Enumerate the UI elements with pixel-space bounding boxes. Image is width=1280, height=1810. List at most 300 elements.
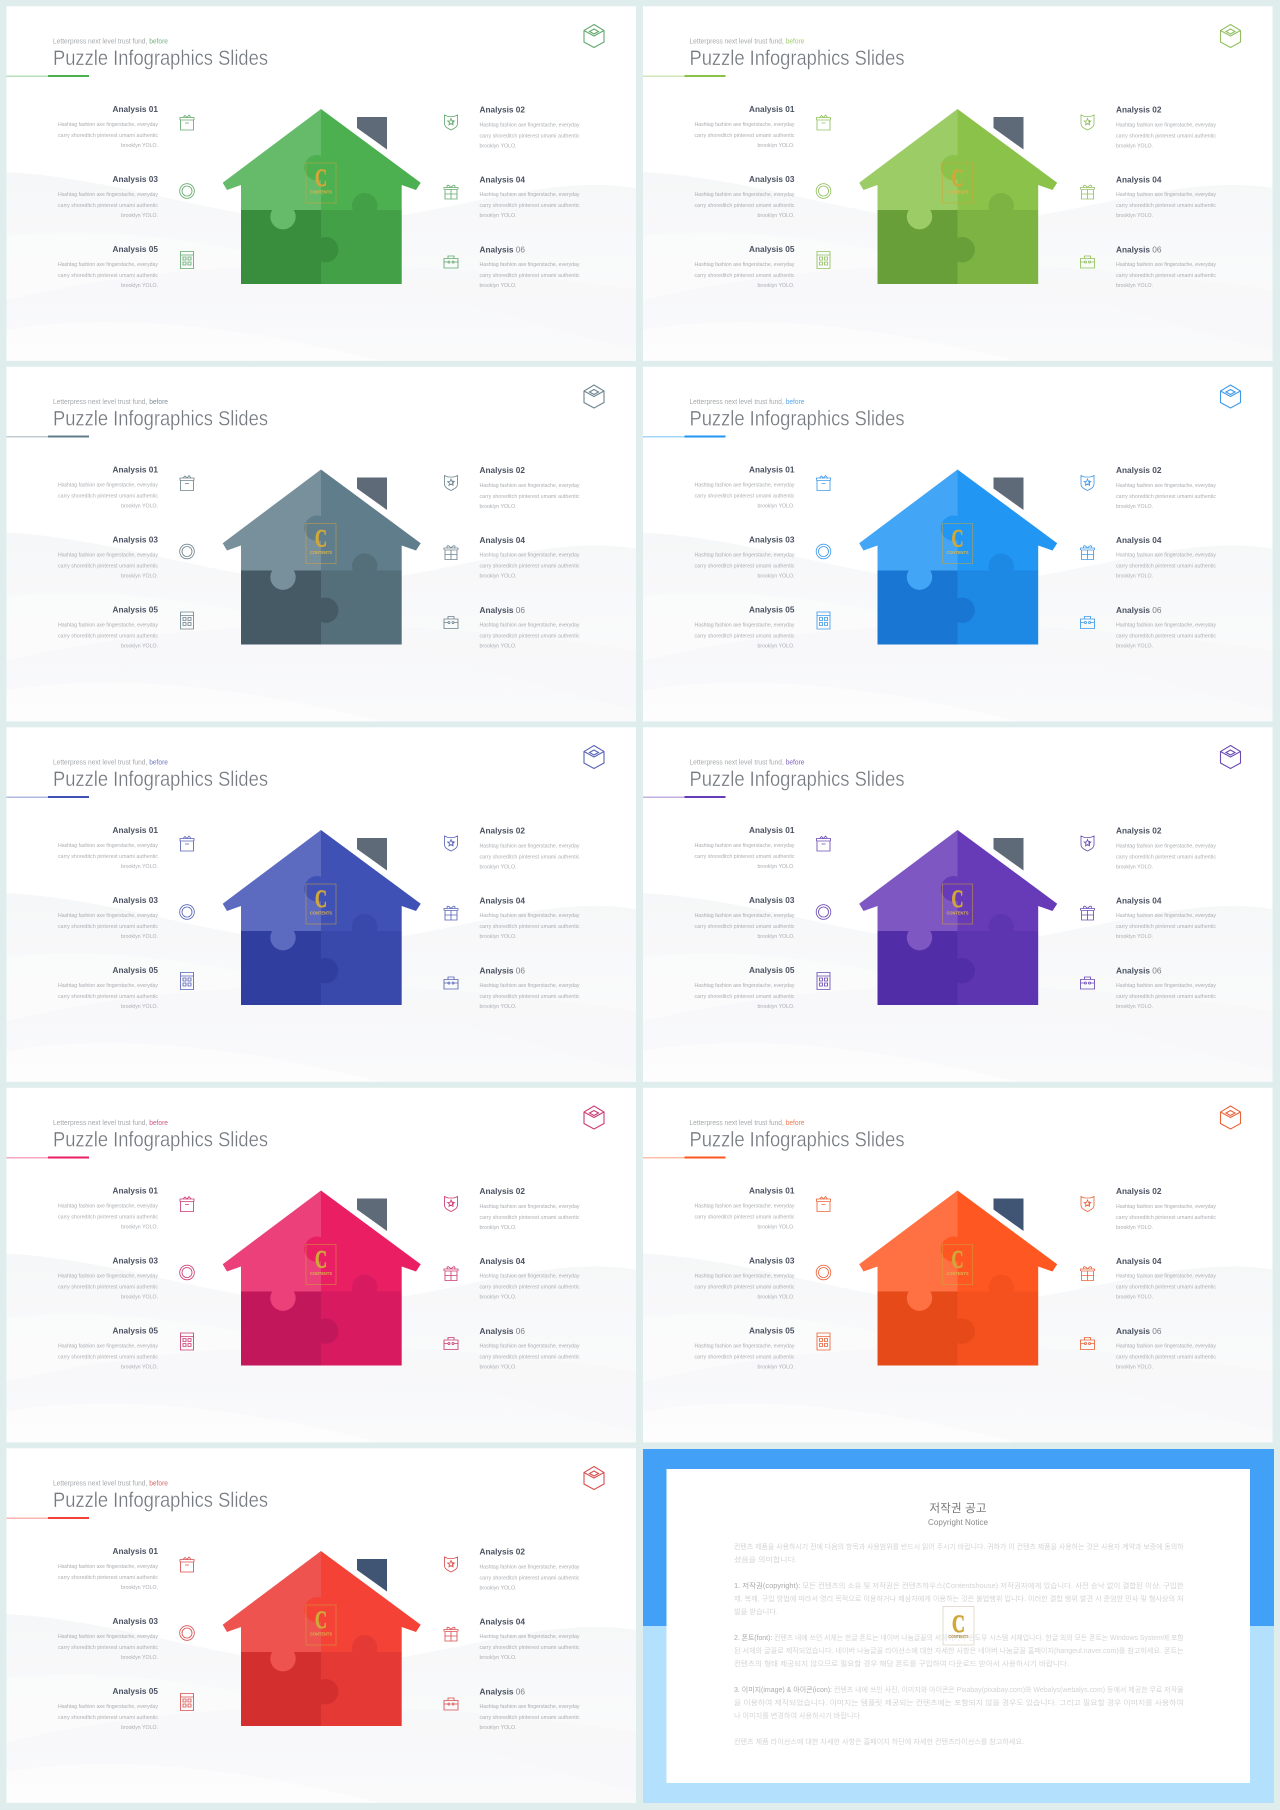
icon: calendar — [180, 1333, 194, 1350]
text: Analysis 05: Hashtag fashion axe fingerstache, everyday — [694, 262, 795, 268]
panel: copyright notice — [643, 1449, 1274, 1803]
watermark: CONTENTS — [946, 910, 968, 916]
text: Analysis 04: brooklyn YOLO. — [1116, 934, 1153, 940]
icon: calendar — [180, 972, 194, 990]
icon: briefcase — [1080, 1338, 1094, 1350]
icon: cube logo — [1220, 24, 1240, 48]
text: Analysis 05: Analysis 05 — [112, 244, 158, 254]
text: Analysis 05: Analysis 05 — [112, 1686, 158, 1696]
watermark: CONTENTS — [310, 910, 332, 916]
notice intro — [734, 1542, 1184, 1564]
text: Analysis 06: carry shoreditch pinterest umami authentic — [1116, 634, 1216, 640]
text: Analysis 01: brooklyn YOLO. — [121, 864, 158, 870]
watermark — [306, 524, 336, 564]
heading underline — [643, 436, 726, 438]
text: Analysis 04: carry shoreditch pinterest umami authentic — [480, 203, 580, 209]
text: Analysis 06: Analysis 06 — [480, 1686, 525, 1696]
text: Analysis 01 — [694, 104, 795, 149]
text: Analysis 06: brooklyn YOLO. — [480, 1004, 516, 1010]
watermark — [943, 1606, 974, 1645]
icon: box — [816, 476, 830, 490]
text: Analysis 01: brooklyn YOLO. — [758, 864, 794, 870]
watermark: CONTENTS — [946, 1271, 968, 1276]
text: Analysis 06: brooklyn YOLO. — [1116, 644, 1153, 650]
text: Analysis 06: Analysis 06 — [1116, 244, 1162, 254]
text: Analysis 04: brooklyn YOLO. — [480, 934, 516, 940]
icon: shield — [444, 1196, 458, 1212]
icon: box — [180, 476, 194, 490]
watermark: C — [952, 1611, 965, 1638]
watermark: CONTENTS — [946, 190, 968, 194]
text: Analysis 04: Analysis 04 — [1116, 535, 1162, 545]
house puzzle — [223, 1190, 421, 1366]
icon: shield — [1081, 1196, 1094, 1212]
text: Analysis 03: Hashtag fashion axe fingerstache, everyday — [58, 192, 158, 198]
text: Analysis 06: carry shoreditch pinterest umami authentic — [480, 994, 580, 1000]
notice font: 된 서체와 글꼴로 제작되었습니다. 네이버 나눔글꼴 라이선스에 대한 자세한 사항은 네이버 나눔글꼴 홈페이지(hangeul.naver.com)를 참고하세요. 폰트는 — [734, 1646, 1184, 1655]
text: Analysis 03: brooklyn YOLO. — [121, 1655, 158, 1661]
text: Analysis 04: Analysis 04 — [480, 1616, 525, 1626]
text: Analysis 04: brooklyn YOLO. — [1116, 1294, 1153, 1300]
text: Analysis 01: brooklyn YOLO. — [758, 1224, 794, 1230]
text: Analysis 05: Hashtag fashion axe fingerstache, everyday — [58, 1344, 158, 1350]
text: Analysis 03: Analysis 03 — [112, 534, 158, 544]
icon: briefcase — [1080, 256, 1094, 268]
text: Analysis 04: Hashtag fashion axe fingerstache, everyday — [1116, 552, 1216, 558]
house puzzle — [859, 470, 1057, 644]
text: Analysis 04: carry shoreditch pinterest umami authentic — [1116, 203, 1216, 209]
text: Analysis 01 — [58, 464, 158, 510]
text: Analysis 04 — [480, 535, 580, 580]
text: Analysis 05: carry shoreditch pinterest umami authentic — [58, 1715, 158, 1721]
text: Analysis 05 — [694, 965, 795, 1010]
icon: ring — [180, 1626, 194, 1640]
text: Analysis 03 — [58, 1616, 158, 1661]
text: Analysis 01: Hashtag fashion axe fingerstache, everyday — [58, 122, 158, 128]
text: Analysis 01 — [694, 464, 795, 510]
icon: calendar — [817, 612, 830, 629]
watermark: CONTENTS — [946, 550, 968, 555]
text: Analysis 02: Analysis 02 — [480, 104, 525, 114]
notice copyright: 제, 복제, 구입 방법에 따라서 영리 목적으로 이용하거나 제삼자에게 이용하는 것은 불법행위 입니다. 이러한 결합 행위 발견 시 준엄한 민사 및 형사상의 처 — [734, 1594, 1184, 1603]
text: Analysis 03: brooklyn YOLO. — [758, 934, 794, 940]
text: Analysis 05: carry shoreditch pinterest umami authentic — [58, 273, 158, 279]
icon: ring — [816, 1265, 831, 1280]
panel: light green slide — [643, 6, 1272, 361]
text: Analysis 04: carry shoreditch pinterest umami authentic — [1116, 924, 1216, 930]
text: Analysis 04 — [480, 896, 580, 940]
text: Analysis 02: Analysis 02 — [480, 1546, 525, 1556]
icon: box — [180, 836, 194, 851]
text: Analysis 06: carry shoreditch pinterest umami authentic — [1116, 273, 1216, 279]
text: Analysis 05: brooklyn YOLO. — [758, 1004, 794, 1010]
icon: shield — [444, 476, 458, 490]
text: Analysis 04: Analysis 04 — [480, 535, 525, 545]
text: Analysis 06: brooklyn YOLO. — [480, 283, 516, 289]
house puzzle — [223, 1551, 421, 1726]
text: Analysis 05: carry shoreditch pinterest umami authentic — [694, 1354, 795, 1360]
text: Analysis 02 — [480, 465, 580, 510]
text: Analysis 05: Hashtag fashion axe fingerstache, everyday — [58, 983, 158, 989]
text: Analysis 04: carry shoreditch pinterest umami authentic — [1116, 564, 1216, 570]
notice copyright: 벌을 받습니다. — [734, 1607, 778, 1616]
heading underline — [6, 796, 89, 798]
text: Analysis 01 — [694, 825, 795, 870]
text: Analysis 02: brooklyn YOLO. — [480, 144, 516, 150]
text: Analysis 03: carry shoreditch pinterest umami authentic — [694, 924, 795, 930]
watermark: C — [315, 1246, 327, 1274]
text: Analysis 01: Hashtag fashion axe fingerstache, everyday — [694, 482, 795, 488]
text: Analysis 02: carry shoreditch pinterest umami authentic — [480, 854, 580, 860]
text: Analysis 05: carry shoreditch pinterest umami authentic — [694, 273, 795, 279]
heading underline — [643, 796, 726, 798]
icon: box — [180, 1196, 194, 1212]
text: Analysis 02: Analysis 02 — [480, 826, 525, 836]
text: Analysis 06: Analysis 06 — [1116, 605, 1162, 615]
notice image and icon: 을 이용하여 제작되었습니다. 이미지는 템플릿 제공되는 컨텐츠에는 포함되지 않을 경우도 있습니다. 그리고 필요할 경우 이미지를 사용하여 — [734, 1698, 1184, 1707]
icon: gift — [444, 1267, 458, 1280]
text: Analysis 06: Analysis 06 — [1116, 1326, 1162, 1336]
text: Analysis 04 — [480, 1256, 580, 1300]
text: Analysis 06: brooklyn YOLO. — [1116, 1004, 1153, 1010]
text: Analysis 01: Hashtag fashion axe fingerstache, everyday — [694, 122, 795, 128]
text: Analysis 02: Analysis 02 — [480, 465, 525, 475]
text: Analysis 02: Analysis 02 — [1116, 1186, 1162, 1196]
icon: ring — [180, 905, 194, 919]
watermark: C — [952, 165, 964, 192]
text: Analysis 01: Hashtag fashion axe fingerstache, everyday — [58, 1564, 158, 1570]
text: Analysis 06: Analysis 06 — [480, 605, 525, 615]
panel: green slide — [6, 6, 636, 361]
text: Analysis 03: Hashtag fashion axe fingerstache, everyday — [694, 913, 795, 919]
notice copyright — [734, 1581, 1184, 1616]
text: Analysis 06 — [1116, 1326, 1216, 1370]
panel: purple slide — [643, 727, 1272, 1082]
notice copyright: 1. 저작권(copyright): 모든 컨텐츠의 소유 및 저작권은 컨텐츠하우스(Contentshouse) 저작권자에게 있습니다. 사전 승낙 없이 결합된 이상, 구입한 — [734, 1581, 1184, 1590]
text: Analysis 01: carry shoreditch pinterest umami authentic — [58, 133, 158, 139]
text: Analysis 05: Analysis 05 — [749, 965, 795, 975]
kicker: Letterpress next level trust fund, before — [53, 1478, 168, 1488]
text: Analysis 02: carry shoreditch pinterest umami authentic — [1116, 854, 1216, 860]
text: Analysis 03 — [58, 1256, 158, 1300]
text: Analysis 04: Hashtag fashion axe fingerstache, everyday — [480, 192, 580, 198]
text: Analysis 02: Hashtag fashion axe fingerstache, everyday — [1116, 483, 1216, 489]
icon: briefcase — [444, 256, 458, 268]
house puzzle — [223, 830, 421, 1005]
text: Analysis 02: carry shoreditch pinterest umami authentic — [480, 1215, 580, 1221]
text: Analysis 05: brooklyn YOLO. — [121, 283, 158, 289]
text: Analysis 05: Hashtag fashion axe fingerstache, everyday — [694, 983, 795, 989]
heading underline — [643, 1156, 726, 1158]
text: Analysis 06: carry shoreditch pinterest umami authentic — [1116, 1354, 1216, 1360]
text: Analysis 06 — [1116, 244, 1216, 289]
icon: calendar — [180, 252, 194, 268]
watermark: C — [315, 165, 327, 192]
heading: Puzzle Infographics Slides — [690, 408, 904, 430]
panel: blue-grey slide — [6, 367, 636, 721]
house puzzle — [859, 830, 1057, 1005]
text: Analysis 05 — [58, 604, 158, 650]
watermark: C — [952, 1246, 964, 1274]
text: Analysis 06: Analysis 06 — [480, 966, 525, 976]
text: Analysis 03: Hashtag fashion axe fingerstache, everyday — [694, 1274, 795, 1280]
text: Analysis 02 — [480, 104, 580, 150]
watermark — [306, 163, 336, 203]
heading underline — [6, 1517, 89, 1519]
icon: briefcase — [444, 616, 458, 628]
text: Analysis 03: carry shoreditch pinterest umami authentic — [694, 1284, 795, 1290]
watermark: C — [952, 886, 964, 913]
text: Analysis 05 — [58, 1686, 158, 1731]
icon: box — [816, 836, 830, 851]
icon: gift — [1080, 1267, 1094, 1280]
panel: indigo slide — [6, 727, 636, 1082]
icon: ring — [816, 544, 831, 559]
watermark: CONTENTS — [310, 1632, 332, 1636]
text: Analysis 06: carry shoreditch pinterest umami authentic — [480, 1715, 580, 1721]
text: Analysis 02: Hashtag fashion axe fingerstache, everyday — [480, 1564, 580, 1570]
text: Analysis 03: carry shoreditch pinterest umami authentic — [58, 924, 158, 930]
kicker: Letterpress next level trust fund, before — [53, 758, 168, 766]
text: Analysis 05: brooklyn YOLO. — [121, 1364, 158, 1370]
kicker: Letterpress next level trust fund, before — [690, 36, 804, 46]
text: Analysis 04: Analysis 04 — [480, 896, 525, 906]
text: Analysis 03: carry shoreditch pinterest umami authentic — [58, 564, 158, 570]
text: Analysis 04: Analysis 04 — [1116, 174, 1162, 184]
icon: ring — [180, 544, 194, 559]
text: Analysis 04: Hashtag fashion axe fingerstache, everyday — [1116, 192, 1216, 198]
text: Analysis 04: carry shoreditch pinterest umami authentic — [480, 564, 580, 570]
text: Analysis 03: brooklyn YOLO. — [758, 1294, 794, 1300]
text: Analysis 04: Hashtag fashion axe fingerstache, everyday — [1116, 913, 1216, 919]
text: Analysis 03: Hashtag fashion axe fingerstache, everyday — [58, 552, 158, 558]
text: Analysis 04: carry shoreditch pinterest umami authentic — [480, 1645, 580, 1651]
text: Analysis 01: Analysis 01 — [749, 464, 795, 474]
watermark: C — [952, 526, 964, 552]
text: Analysis 06: Hashtag fashion axe fingerstache, everyday — [1116, 983, 1216, 989]
notice font: 컨텐츠의 형태 제공되지 않으므로 필요할 경우 해당 폰트를 구입하여 다운로드 받아서 사용하시기 바랍니다. — [734, 1659, 1069, 1668]
text: Analysis 06: Hashtag fashion axe fingerstache, everyday — [480, 622, 580, 628]
text: Analysis 03: brooklyn YOLO. — [121, 1294, 158, 1300]
text: Analysis 05: Analysis 05 — [749, 604, 795, 614]
text: Analysis 01: carry shoreditch pinterest umami authentic — [694, 133, 795, 139]
text: Analysis 02: Hashtag fashion axe fingerstache, everyday — [1116, 122, 1216, 128]
text: Analysis 03: Hashtag fashion axe fingerstache, everyday — [694, 552, 795, 558]
kicker: Letterpress next level trust fund, before — [53, 397, 168, 406]
text: Analysis 02 — [1116, 826, 1216, 870]
text: Analysis 04: Analysis 04 — [480, 1256, 525, 1266]
text: Analysis 02: brooklyn YOLO. — [1116, 864, 1153, 870]
icon: gift — [444, 546, 458, 560]
text: Analysis 05 — [694, 244, 795, 289]
watermark — [942, 524, 972, 564]
notice title: 저작권 공고 — [930, 1502, 986, 1515]
text: Analysis 01: Hashtag fashion axe fingerstache, everyday — [694, 843, 795, 849]
watermark: CONTENTS — [948, 1634, 968, 1639]
heading: Puzzle Infographics Slides — [53, 47, 268, 70]
icon: briefcase — [444, 1338, 458, 1350]
text: Analysis 01: Hashtag fashion axe fingerstache, everyday — [694, 1204, 795, 1210]
text: Analysis 06: Hashtag fashion axe fingerstache, everyday — [480, 1344, 580, 1350]
kicker: Letterpress next level trust fund, before — [690, 397, 804, 406]
text: Analysis 06: brooklyn YOLO. — [480, 644, 516, 650]
text: Analysis 01: carry shoreditch pinterest umami authentic — [694, 494, 795, 500]
icon: gift — [444, 906, 458, 920]
watermark — [942, 163, 972, 203]
text: Analysis 06: carry shoreditch pinterest umami authentic — [480, 634, 580, 640]
text: Analysis 05: brooklyn YOLO. — [121, 1004, 158, 1010]
heading underline — [643, 75, 726, 77]
text: Analysis 03: carry shoreditch pinterest umami authentic — [58, 1645, 158, 1651]
text: Analysis 01: Analysis 01 — [112, 825, 158, 835]
text: Analysis 03: brooklyn YOLO. — [121, 934, 158, 940]
text: Analysis 05 — [58, 1326, 158, 1370]
icon: cube logo — [1220, 385, 1240, 408]
text: Analysis 02 — [1116, 104, 1216, 150]
text: Analysis 01 — [58, 1186, 158, 1230]
text: Analysis 04 — [480, 174, 580, 219]
text: Analysis 06: Hashtag fashion axe fingerstache, everyday — [480, 1704, 580, 1710]
text: Analysis 06: Analysis 06 — [1116, 966, 1162, 976]
watermark — [306, 1605, 336, 1645]
watermark — [306, 884, 336, 924]
text: Analysis 06: Hashtag fashion axe fingerstache, everyday — [1116, 622, 1216, 628]
text: Analysis 01: brooklyn YOLO. — [121, 143, 158, 149]
text: Analysis 06: Analysis 06 — [480, 244, 525, 254]
text: Analysis 05: Hashtag fashion axe fingerstache, everyday — [694, 1344, 795, 1350]
text: Analysis 01: Analysis 01 — [112, 464, 158, 474]
text: Analysis 01: Hashtag fashion axe fingerstache, everyday — [58, 482, 158, 488]
text: Analysis 06: brooklyn YOLO. — [1116, 1364, 1153, 1370]
text: Analysis 04: brooklyn YOLO. — [480, 213, 516, 219]
text: Analysis 05: carry shoreditch pinterest umami authentic — [694, 634, 795, 640]
text: Analysis 05: brooklyn YOLO. — [121, 1725, 158, 1731]
text: Analysis 04: brooklyn YOLO. — [480, 1655, 516, 1661]
text: Analysis 01: Analysis 01 — [749, 825, 795, 835]
text: Analysis 02: brooklyn YOLO. — [480, 1225, 516, 1231]
text: Analysis 03: Analysis 03 — [749, 895, 795, 905]
text: Analysis 03 — [58, 534, 158, 580]
text: Analysis 05: carry shoreditch pinterest umami authentic — [58, 994, 158, 1000]
watermark: C — [315, 1607, 327, 1634]
heading: Puzzle Infographics Slides — [53, 1489, 268, 1512]
text: Analysis 01: carry shoreditch pinterest umami authentic — [694, 854, 795, 860]
text: Analysis 03: brooklyn YOLO. — [758, 213, 794, 219]
watermark: C — [315, 886, 327, 913]
text: Analysis 04: Analysis 04 — [1116, 896, 1162, 906]
icon: briefcase — [1080, 977, 1094, 989]
icon: cube logo — [584, 24, 604, 48]
text: Analysis 05 — [58, 244, 158, 289]
text: Analysis 05 — [694, 604, 795, 650]
icon: briefcase — [444, 977, 458, 989]
text: Analysis 06 — [480, 605, 580, 650]
text: Analysis 05: Analysis 05 — [112, 604, 158, 614]
text: Analysis 03: Analysis 03 — [749, 1256, 795, 1266]
icon: calendar — [817, 1333, 830, 1350]
text: Analysis 04: Hashtag fashion axe fingerstache, everyday — [480, 913, 580, 919]
icon: cube logo — [584, 385, 604, 408]
icon: shield — [444, 1557, 458, 1572]
text: Analysis 01: Analysis 01 — [749, 104, 795, 114]
text: Analysis 01: brooklyn YOLO. — [121, 1224, 158, 1230]
text: Analysis 03 — [694, 1256, 795, 1300]
text: Analysis 03: Hashtag fashion axe fingerstache, everyday — [58, 913, 158, 919]
text: Analysis 04: Hashtag fashion axe fingerstache, everyday — [480, 1274, 580, 1280]
text: Analysis 02: Hashtag fashion axe fingerstache, everyday — [1116, 844, 1216, 850]
text: Analysis 02: carry shoreditch pinterest umami authentic — [480, 1576, 580, 1582]
text: Analysis 01: carry shoreditch pinterest umami authentic — [694, 1214, 795, 1220]
icon: shield — [444, 115, 458, 130]
text: Analysis 05: Hashtag fashion axe fingerstache, everyday — [58, 622, 158, 628]
text: Analysis 03: Analysis 03 — [749, 534, 795, 544]
text: Analysis 06: brooklyn YOLO. — [480, 1725, 516, 1731]
kicker: Letterpress next level trust fund, before — [690, 758, 804, 766]
text: Analysis 03: Analysis 03 — [112, 174, 158, 184]
heading: Puzzle Infographics Slides — [53, 408, 268, 430]
icon: gift — [1080, 185, 1094, 199]
icon: calendar — [817, 252, 830, 268]
text: Analysis 06 — [480, 1686, 580, 1731]
icon: calendar — [180, 1694, 194, 1710]
text: Analysis 02 — [480, 826, 580, 870]
text: Analysis 03: Hashtag fashion axe fingerstache, everyday — [58, 1634, 158, 1640]
text: Analysis 05 — [58, 965, 158, 1010]
text: Analysis 02: Analysis 02 — [1116, 826, 1162, 836]
text: Analysis 02: brooklyn YOLO. — [480, 864, 516, 870]
text: Analysis 05: carry shoreditch pinterest umami authentic — [58, 1354, 158, 1360]
text: Analysis 06 — [1116, 966, 1216, 1010]
icon: briefcase — [1080, 616, 1094, 628]
text: Analysis 05 — [694, 1326, 795, 1370]
text: Analysis 03 — [58, 895, 158, 940]
heading: Puzzle Infographics Slides — [690, 1128, 904, 1152]
heading underline — [6, 1156, 89, 1158]
text: Analysis 04: carry shoreditch pinterest umami authentic — [480, 1284, 580, 1290]
text: Analysis 05: carry shoreditch pinterest umami authentic — [694, 994, 795, 1000]
text: Analysis 02 — [480, 1546, 580, 1592]
panel: orange slide — [643, 1088, 1272, 1442]
notice image and icon — [734, 1685, 1184, 1720]
text: Analysis 06: brooklyn YOLO. — [480, 1364, 516, 1370]
text: Analysis 04 — [480, 1616, 580, 1661]
text: Analysis 03 — [694, 534, 795, 580]
text: Analysis 06: Hashtag fashion axe fingerstache, everyday — [1116, 1344, 1216, 1350]
text: Analysis 02: carry shoreditch pinterest umami authentic — [1116, 134, 1216, 140]
kicker: Letterpress next level trust fund, before — [53, 36, 168, 46]
text: Analysis 05: Hashtag fashion axe fingerstache, everyday — [58, 1704, 158, 1710]
text: Analysis 04: Analysis 04 — [1116, 1256, 1162, 1266]
text: Analysis 03: carry shoreditch pinterest umami authentic — [58, 203, 158, 209]
icon: gift — [1080, 546, 1094, 560]
text: Analysis 02: Hashtag fashion axe fingerstache, everyday — [480, 844, 580, 850]
icon: ring — [816, 184, 831, 198]
notice subtitle: Copyright Notice — [928, 1518, 989, 1527]
notice font: 2. 폰트(font): 컨텐츠 내에 쓰인 서체는 한글 폰트는 네이버 나눔글꼴의 서체이거나 윈도우 시스템 서체입니다. 한글 외의 모든 폰트는 Windows System에 포함 — [734, 1633, 1184, 1642]
text: Analysis 01: Hashtag fashion axe fingerstache, everyday — [58, 843, 158, 849]
text: Analysis 06: carry shoreditch pinterest umami authentic — [480, 273, 580, 279]
text: Analysis 02: Hashtag fashion axe fingerstache, everyday — [480, 1204, 580, 1210]
text: Analysis 03: Analysis 03 — [749, 174, 795, 184]
text: Analysis 05: brooklyn YOLO. — [758, 1364, 794, 1370]
house puzzle — [223, 470, 421, 644]
icon: box — [816, 115, 830, 130]
text: Analysis 01: brooklyn YOLO. — [121, 1585, 158, 1591]
icon: gift — [444, 185, 458, 199]
watermark: CONTENTS — [310, 1271, 332, 1276]
text: Analysis 01 — [58, 825, 158, 870]
text: Analysis 03: carry shoreditch pinterest umami authentic — [694, 203, 795, 209]
